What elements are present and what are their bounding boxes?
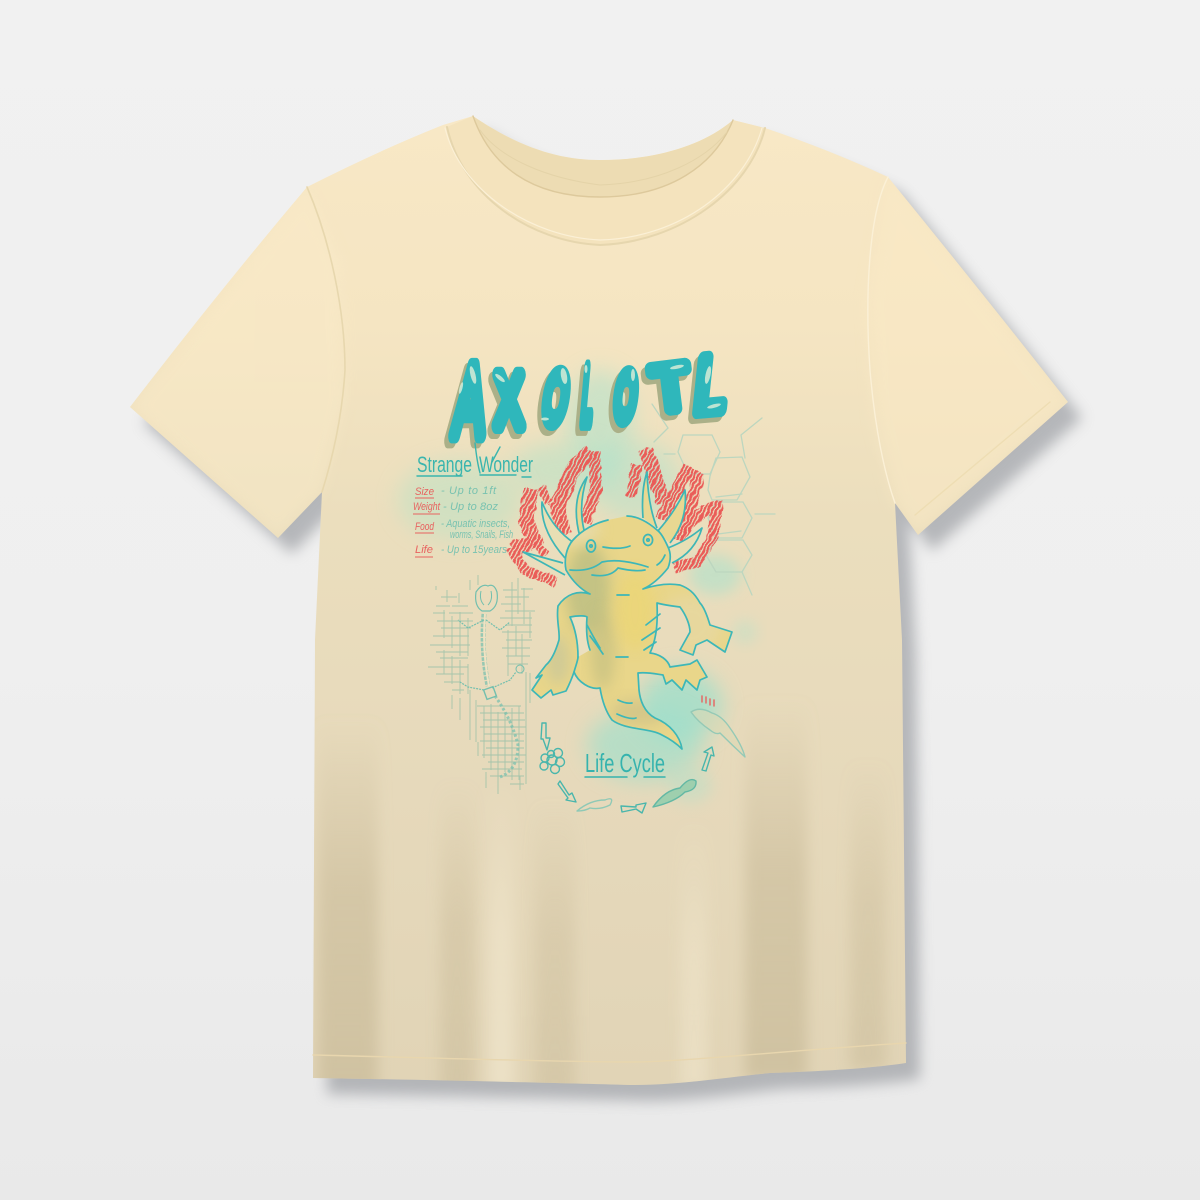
- fact: food: - Aquatic insects,: [441, 518, 510, 530]
- collar and seams: [307, 116, 1050, 1062]
- title: O: [539, 359, 573, 437]
- fact: weight: [413, 501, 498, 514]
- fact: size: - Up to 1ft: [441, 485, 497, 497]
- title shadow: T: [644, 356, 689, 429]
- heading: Life Cycle: Life Cycle: [585, 748, 665, 778]
- gap between left arm and torso: [570, 616, 590, 657]
- title: X: [495, 360, 523, 442]
- fabric folds: [316, 116, 886, 1084]
- fact: life: [415, 544, 507, 557]
- title shadow: X: [491, 365, 519, 447]
- fact: size: Size: [415, 486, 434, 498]
- title: [450, 341, 731, 457]
- shirt drop shadow: [144, 132, 1082, 1101]
- fact: size: [415, 485, 497, 498]
- airbrush colour clouds: [398, 370, 757, 803]
- arrow to larva: [558, 781, 576, 802]
- title shadow: [446, 346, 727, 462]
- shading on body: [546, 516, 722, 725]
- title glossy highlights: [458, 364, 721, 420]
- life cycle diagram: [540, 696, 745, 813]
- title shadow: O: [535, 364, 569, 442]
- t-shirt: [130, 116, 1082, 1101]
- shirt body and sleeves: [130, 116, 1068, 1085]
- title shadow: A: [446, 349, 487, 462]
- title: L: [578, 352, 597, 440]
- eggs: [540, 748, 564, 774]
- heading: Strange Wonder: Strange: [417, 452, 472, 477]
- axolotl facts: [413, 485, 513, 557]
- arrow to juvenile: [702, 747, 714, 771]
- axolotl body: [532, 516, 732, 749]
- tail vertebrae: [495, 696, 518, 777]
- axolotl gills, red hatching: [511, 449, 717, 582]
- axolotl gills, teal outline: [523, 472, 702, 575]
- teal outlines: [532, 516, 732, 749]
- collar band: [448, 116, 764, 162]
- title: A: [450, 344, 491, 457]
- arrow between larvae: [621, 803, 646, 813]
- fact: weight: Weight: [413, 501, 441, 513]
- heading: Strange Wonder: Wonder: [479, 452, 533, 477]
- fact: life: - Up to 15years: [441, 544, 507, 556]
- sleeve highlights: [130, 187, 345, 538]
- axolotl skeleton: [458, 585, 524, 777]
- yellow body fill: [532, 516, 732, 749]
- arrow to eggs: [541, 723, 550, 750]
- juvenile axolotl: [691, 709, 745, 757]
- fact: food: [415, 518, 513, 541]
- title shadow: O: [607, 366, 636, 438]
- inside back of collar: [473, 116, 733, 197]
- heading: Strange Wonder: [417, 443, 533, 477]
- title shadow: L: [574, 357, 593, 445]
- fact: food: worms, Snails, Fish: [450, 529, 513, 541]
- title: O: [611, 361, 640, 433]
- spine: [483, 614, 488, 686]
- fact: life: Life: [415, 544, 433, 556]
- fact: weight: - Up to 8oz: [443, 501, 498, 513]
- axolotl face: [586, 540, 596, 552]
- title shadow: L: [687, 346, 727, 434]
- tadpole with legs: [653, 780, 696, 807]
- title: T: [648, 351, 693, 424]
- skeleton grid hatching: [428, 575, 535, 794]
- title: L: [691, 341, 731, 429]
- larva: [577, 799, 612, 811]
- fact: food: Food: [415, 521, 435, 533]
- hexagon pattern: [652, 404, 775, 595]
